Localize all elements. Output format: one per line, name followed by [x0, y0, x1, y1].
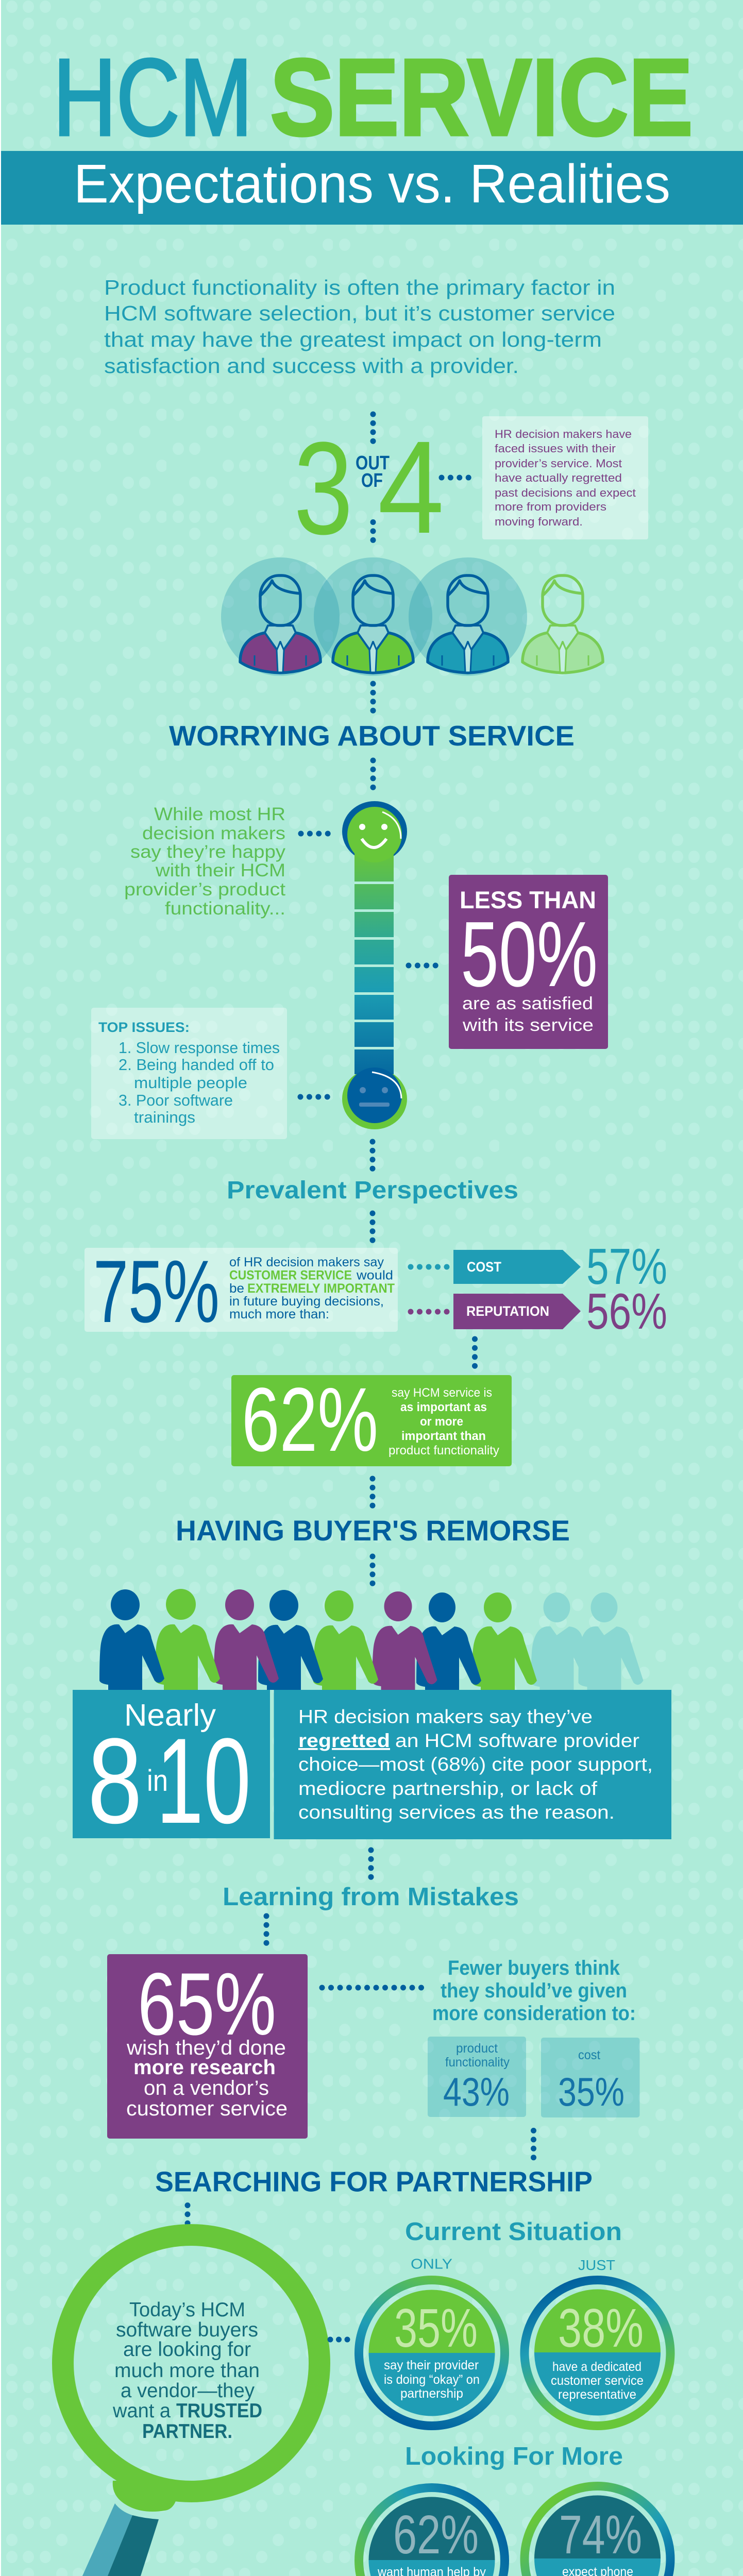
heading: having buyer's remorse: HAVING BUYER'S REMORSE	[176, 1514, 570, 1547]
callout: HR decision makers: moving forward.	[495, 515, 583, 528]
person 10 faded	[578, 1592, 643, 1690]
dotted connector	[370, 1213, 375, 1241]
panel: regretted provider choice: consulting services as the reason.	[298, 1802, 615, 1823]
subtitle banner	[1, 151, 743, 225]
person 5 green	[313, 1590, 378, 1690]
text: while most HR decision makers: say they’re happy	[130, 842, 286, 862]
person 6 purple	[372, 1591, 437, 1690]
arrow label: cost 57%: COST	[467, 1259, 501, 1275]
callout: HR decision makers: more from providers	[495, 500, 606, 513]
dotted connector	[330, 2337, 347, 2342]
intro paragraph: HCM software selection, but it’s customer service	[104, 301, 615, 325]
intro paragraph	[104, 276, 615, 378]
magnifier text: want a	[112, 2400, 171, 2422]
panel: 75 percent: EXTREMELY IMPORTANT	[247, 1281, 395, 1296]
crowd of ten people	[99, 1589, 643, 1690]
icon: neutral face	[359, 1072, 401, 1107]
stat card: cost 35%	[541, 2038, 640, 2117]
callout: 62 percent: 62%	[242, 1369, 378, 1470]
callout: 65 percent: on a vendor’s	[144, 2077, 269, 2099]
person 2 green	[155, 1589, 220, 1690]
heading: prevalent perspectives: Prevalent Perspectives	[227, 1177, 518, 1204]
panel: 75 percent: would	[356, 1268, 393, 1283]
arrow label: cost 57%	[453, 1238, 667, 1295]
magnifier text: a vendor—they	[121, 2380, 255, 2402]
callout: 65 percent: 65%	[138, 1955, 276, 2054]
stat circle: 38%: customer service	[551, 2374, 644, 2388]
heading: worrying about service: WORRYING ABOUT SERVICE	[169, 720, 575, 752]
intro paragraph: Product functionality is often the primary factor in	[104, 276, 615, 299]
text: while most HR decision makers: with their HCM	[155, 860, 285, 880]
text: while most HR decision makers: provider’s product	[124, 879, 285, 900]
dotted connector	[370, 1142, 375, 1168]
heading: current situation: Current Situation	[405, 2218, 622, 2246]
panel: top issues: 3. Poor software	[119, 1091, 233, 1109]
stat card: product functionality 43%: product	[456, 2041, 498, 2056]
panel: top issues: 2. Being handed off to	[119, 1056, 274, 1074]
stat: 3 out of 4: OUT	[356, 452, 390, 474]
panel: regretted provider choice	[274, 1690, 671, 1839]
panel: 75 percent: much more than:	[229, 1307, 329, 1321]
callout: 65 percent: customer service	[126, 2097, 288, 2120]
person 4 blue	[258, 1590, 323, 1690]
person 8 green	[472, 1592, 537, 1690]
panel: 75 percent: in future buying decisions,	[229, 1294, 384, 1309]
stat circle: 62%: 62%	[393, 2504, 479, 2565]
heading: looking for more: Looking For More	[405, 2443, 623, 2470]
thermometer	[342, 801, 407, 1129]
dotted connector	[442, 475, 469, 480]
stat circle: 38%: 38%	[558, 2298, 644, 2359]
stat circle: 35%: say their provider	[384, 2358, 479, 2372]
panel: regretted provider choice: regretted	[298, 1730, 390, 1751]
stat circle: 74%	[525, 2486, 670, 2576]
text: while most HR decision makers: decision makers	[142, 823, 285, 843]
text: fewer buyers think: more consideration to:	[432, 2002, 636, 2025]
stat: 3 out of 4: OF	[361, 470, 383, 492]
dotted connector	[184, 2205, 191, 2224]
text: fewer buyers think	[432, 1957, 636, 2025]
callout: less than 50%: LESS THAN	[460, 886, 596, 913]
callout: HR decision makers: faced issues with their	[495, 442, 616, 455]
icon: person purple	[240, 575, 320, 673]
panel: regretted provider choice: mediocre partnership, or lack of	[298, 1778, 598, 1799]
person 9 faded	[531, 1592, 596, 1690]
panel: 75 percent: 75%	[93, 1242, 219, 1341]
panel: top issues: 1. Slow response times	[119, 1039, 280, 1057]
arrow label: reputation 56%	[453, 1283, 667, 1340]
stat circle: 35%	[359, 2280, 505, 2426]
person 3 purple	[214, 1589, 279, 1690]
text: fewer buyers think: they should’ve given	[441, 1979, 627, 2002]
stat circle: 35%: partnership	[400, 2386, 463, 2401]
callout: HR decision makers: past decisions and expect	[495, 486, 636, 499]
icon: magnifying glass	[63, 2235, 319, 2576]
stat circle: 38%: representative	[558, 2387, 636, 2402]
dotted connector	[368, 1850, 374, 1877]
dotted connector	[322, 1985, 421, 1991]
panel: 75 percent: be	[229, 1281, 244, 1296]
callout: 62 percent: product functionality	[389, 1444, 499, 1458]
callout: less than 50%	[449, 875, 608, 1049]
icon: smiley face	[359, 812, 401, 848]
magnifier text: PARTNER.	[142, 2420, 232, 2443]
stat card: product functionality 43%: 43%	[443, 2069, 510, 2114]
label: just: JUST	[578, 2257, 615, 2273]
panel: top issues: multiple people	[134, 1074, 247, 1092]
subtitle banner: Expectations vs. Realities	[74, 154, 670, 214]
panel: top issues	[91, 1008, 287, 1139]
magnifier text: are looking for	[123, 2338, 251, 2361]
person 1 blue	[99, 1589, 164, 1690]
callout: 62 percent: say HCM service is	[392, 1386, 492, 1400]
panel: 75 percent: CUSTOMER SERVICE	[229, 1268, 352, 1283]
callout: 62 percent	[231, 1369, 512, 1470]
dotted connector	[531, 2131, 536, 2158]
panel: 75 percent: of HR decision makers say	[229, 1255, 384, 1269]
callout: 65 percent: more research	[133, 2056, 276, 2079]
panel: nearly 8 in 10: 8	[88, 1713, 142, 1849]
panel: regretted provider choice: an HCM software provider	[395, 1730, 639, 1751]
dotted connector	[411, 1309, 447, 1315]
stat card: product functionality 43%	[428, 2037, 526, 2117]
text: fewer buyers think: Fewer buyers think	[448, 1957, 620, 1979]
dotted connector	[472, 1339, 478, 1366]
text: while most HR decision makers: functionality...	[165, 899, 285, 919]
dotted connector	[301, 831, 328, 837]
callout: HR decision makers: HR decision makers have	[495, 428, 632, 440]
icon: person light green	[522, 575, 603, 673]
magnifier text: much more than	[114, 2360, 260, 2382]
title: HCM SERVICE	[53, 36, 693, 158]
stat circle: 35%: is doing “okay” on	[384, 2372, 480, 2387]
dotted connector	[409, 962, 436, 969]
dotted connector	[370, 684, 376, 711]
dotted connector	[370, 414, 376, 441]
callout: HR decision makers	[482, 416, 648, 539]
panel: nearly 8 in 10: Nearly	[124, 1698, 216, 1732]
stat: 3 out of 4	[294, 414, 444, 562]
text: while most HR decision makers	[124, 804, 286, 919]
callout: 65 percent	[107, 1954, 308, 2139]
panel: 75 percent	[85, 1242, 398, 1341]
person 7 blue	[416, 1592, 481, 1690]
callout: HR decision makers: have actually regretted	[495, 471, 622, 484]
stat card: product functionality 43%: functionality	[445, 2055, 510, 2070]
dotted connector	[370, 1556, 375, 1584]
magnifier text	[112, 2299, 262, 2443]
intro paragraph: that may have the greatest impact on long-term	[104, 328, 602, 351]
stat circle: 38%: have a dedicated	[552, 2360, 641, 2374]
panel: top issues: TOP ISSUES:	[98, 1020, 190, 1035]
text: while most HR decision makers: While most HR	[154, 804, 285, 824]
arrow label: reputation 56%: 56%	[586, 1283, 667, 1340]
callout: less than 50%: are as satisfied	[462, 994, 593, 1013]
stat: 3 out of 4: 3	[294, 415, 353, 562]
callout: 62 percent: or more	[420, 1415, 463, 1429]
heading: learning from mistakes: Learning from Mistakes	[223, 1883, 519, 1911]
arrow label: reputation 56%: REPUTATION	[466, 1303, 549, 1319]
dotted connector	[264, 1916, 269, 1943]
callout: 65 percent: wish they’d done	[126, 2037, 286, 2059]
callout: 62 percent: as important as	[400, 1400, 487, 1414]
stat circle: 62%	[359, 2487, 505, 2576]
callout: less than 50%: 50%	[461, 903, 598, 1006]
stat circle: 74%: 74%	[559, 2504, 642, 2565]
panel: nearly 8 in 10: 10	[156, 1713, 251, 1849]
dotted connector	[411, 1264, 447, 1269]
dotted connector	[370, 1479, 375, 1505]
magnifier text: Today’s HCM	[129, 2299, 245, 2321]
panel: top issues: trainings	[134, 1108, 195, 1126]
stat circle: 38%	[525, 2280, 670, 2426]
icon: person teal	[428, 575, 508, 673]
panel: nearly 8 in 10: in	[147, 1764, 168, 1798]
callout: less than 50%: with its service	[462, 1015, 594, 1035]
label: only: ONLY	[411, 2256, 452, 2272]
dotted connector	[300, 1094, 328, 1099]
panel: regretted provider choice: HR decision makers say they’ve	[298, 1706, 593, 1727]
title: HCM SERVICE: SERVICE	[270, 36, 693, 158]
arrow label: cost 57%: 57%	[586, 1238, 667, 1295]
stat card: cost 35%: 35%	[558, 2069, 624, 2114]
title: HCM SERVICE: HCM	[53, 36, 252, 158]
stat circle: 35%: 35%	[394, 2298, 478, 2359]
intro paragraph: satisfaction and success with a provider.	[104, 354, 519, 378]
panel: nearly 8 in 10	[73, 1690, 270, 1849]
icon: person green	[333, 575, 413, 673]
callout: HR decision makers: provider’s service. Most	[495, 457, 622, 470]
magnifier text: TRUSTED	[176, 2400, 262, 2422]
heading: searching for partnership: SEARCHING FOR PARTNERSHIP	[155, 2166, 593, 2198]
stat card: cost 35%: cost	[578, 2048, 600, 2062]
magnifier text: software buyers	[116, 2319, 258, 2341]
stat: 3 out of 4: 4	[378, 414, 444, 561]
icon row: four HR people	[221, 557, 603, 676]
dotted connector	[370, 522, 376, 549]
panel: regretted provider choice: choice—most (68%) cite poor support,	[298, 1754, 653, 1775]
callout: 62 percent: important than	[401, 1429, 486, 1443]
dotted connector	[370, 760, 376, 787]
